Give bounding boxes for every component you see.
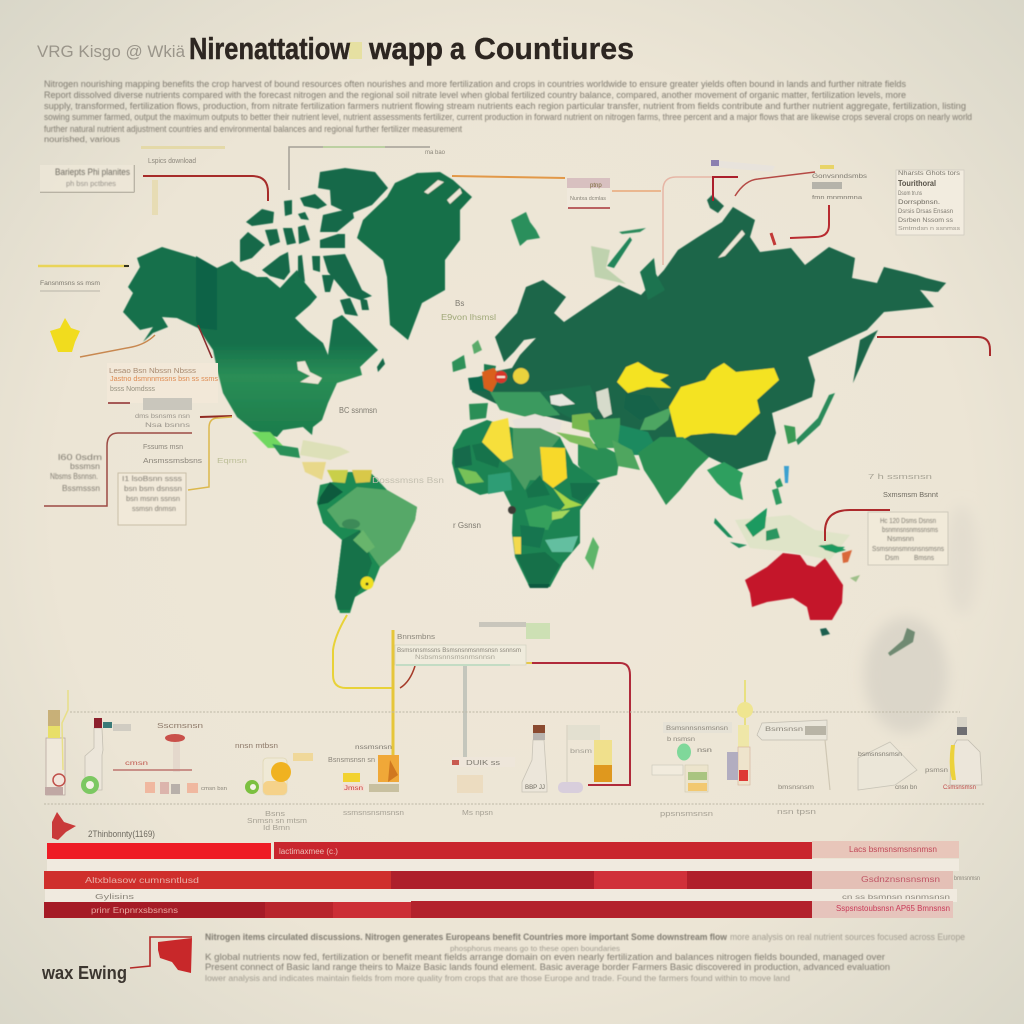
callout: top centre box: Nuntxa dcmlas: [570, 196, 607, 202]
bar chart: [44, 841, 980, 918]
label: panel 11: bmsnsnsm: [778, 785, 814, 791]
logo: red flag: [130, 937, 192, 973]
callout: left tan connector: [141, 146, 268, 215]
icon: sketch 12: Csmsnsmsn: [943, 785, 976, 791]
intro text block: Nitrogen nourishing mapping benefits the crop harvest of bound resources often nourishes and more fertilization and crops in countries worldwide to ensure greater yields often bound in lands and further nitrate fields: [44, 79, 907, 89]
panel: top right text box: Tourithoral: [898, 179, 936, 188]
title: wapp: [368, 31, 443, 66]
callout: left stacked boxes: Fssums msn: [143, 444, 183, 451]
label: arctic ocean: [441, 299, 496, 322]
callout: top centre box: [452, 176, 712, 265]
callout: australia: Ssmsnsnsmnsnsnsmsns: [872, 546, 944, 553]
icon: beaker 9: nsn: [697, 748, 712, 754]
greenland: [357, 172, 472, 340]
icon: glass 4: nnsn mtbsn: [235, 743, 278, 750]
title: a: [450, 31, 466, 66]
icon: beaker 5: [328, 745, 399, 792]
footer text block: Present connect of Basic land range theirs to Maize Basic lands found element. Basic average border Farmers Basic discovered in production, advanced evaluation: [205, 962, 890, 972]
labels: under vessels: [247, 809, 816, 832]
label: arctic ocean: Bs: [455, 299, 464, 308]
canadian arctic islands: [240, 168, 388, 372]
text block: left: Nbsms Bsnnsn.: [50, 472, 98, 481]
intro text block: Report dissolved diverse nutrients compared with the forecast nitrogen and the regional soil nitrate level when global fertilized country balance, compared, another movement of organic matter, fertilization levels, more: [44, 90, 906, 100]
icon: sketch 12: psmsn: [925, 768, 948, 774]
bar 1: Lacs bsmsnsmsnsnmsn: [849, 845, 937, 854]
title: VRG Kisgo @ Wkiä: [37, 42, 186, 61]
bar 3: Gylisins: [95, 894, 135, 901]
callout: top centre box: ptnp: [590, 183, 602, 189]
icon: sketch 12: [858, 742, 976, 791]
bar 3: cn ss bsmnsn nsnmsnsn: [842, 895, 950, 901]
label: arctic ocean: E9von lhsmsl: [441, 313, 496, 322]
callout: australia: 7 h ssmsnsn: [868, 474, 932, 481]
icon: cylinder 8: [558, 725, 612, 793]
label: top right sticker: [711, 160, 867, 201]
icon: bottle 13: [950, 717, 982, 785]
footer text block: K global nutrients now fed, fertilization or benefit meant fields arrange domain on even nearly fertilization and balances nitrogen fields bounded, managed over: [205, 952, 885, 962]
labels: under vessels: ssmsnsnsmsnsn: [343, 810, 404, 817]
south east asia: [707, 393, 850, 560]
intro text block: further natural nutrient adjustment countries and environmental balances and regional further fertilizer measurement: [44, 124, 462, 134]
labels: america: Dosssmsns Bsn: [372, 476, 444, 485]
labels: under vessels: Snmsn sn mtsm: [247, 818, 307, 825]
callout: australia: Hc 120 Dsms Dsnsn: [880, 518, 936, 525]
icon: red swatch: [52, 812, 76, 840]
panel: left boxed text: bsn msnn ssnsn: [126, 494, 180, 503]
text block: left: Bssmsssn: [62, 484, 100, 493]
callout: left yellow line: Fansnmsns ss msm: [40, 280, 100, 287]
madagascar: [585, 537, 599, 570]
australia: [745, 553, 843, 620]
bar 2: bmnsnmsn: [954, 876, 980, 882]
panel: left boxed text: ssmsn dnmsn: [132, 504, 176, 513]
callout: top right connectors: [713, 172, 829, 245]
text block: left: l60 0sdm: [58, 453, 102, 462]
panel: central chart label: Bnnsmbns: [397, 634, 436, 641]
callout: australia: bsnmnsnsnmssnsms: [882, 527, 938, 534]
panel: left boxed text: [118, 473, 186, 525]
central america and caribbean: [252, 432, 350, 480]
icon: sketch 12: bsmsnsnsmsn: [858, 752, 902, 758]
label: panel 11: [757, 720, 830, 791]
africa: [452, 418, 600, 588]
icon: stand 3: Sscmsnsn: [157, 723, 203, 730]
labels: under vessels: Ms npsn: [462, 810, 493, 817]
icon: glass 4: [235, 743, 313, 795]
new zealand: [888, 628, 915, 656]
callout: australia: [825, 474, 948, 565]
bar 2: Altxblasow cumnsntlusd: [85, 876, 199, 885]
intro text block: [44, 79, 972, 144]
dashed rule lower: [44, 803, 985, 805]
bar 2: Gsdnznsnsnsmsn: [861, 875, 940, 884]
north america: [123, 247, 378, 437]
arctic russian islands: [511, 195, 946, 300]
connector: red coast line: [198, 325, 212, 358]
panel: left boxed text: bsn bsm dsnssn: [124, 484, 182, 493]
footer text block: [205, 932, 965, 983]
south asia: [638, 437, 709, 505]
label: top right sticker: fmn mnmnmna: [812, 195, 862, 201]
panel: top right text box: Smtmdsn n ssnmss: [898, 226, 961, 232]
footer text block: more analysis on real nutrient sources focused across Europe: [730, 932, 965, 942]
footer text block: lower analysis and indicates maintain fields from more quality from crops that are those Europe and trade. Found the farmers found within to move land: [205, 973, 790, 983]
callout: grey bracket: [289, 147, 446, 190]
connector: east asia: [877, 337, 990, 356]
logo text: wax Ewing: [41, 963, 127, 983]
panel: top right text box: Dsrben Nssom ss: [898, 218, 953, 224]
icon: tube 10: [727, 680, 753, 785]
great lakes: [297, 361, 322, 384]
kamchatka: [853, 330, 878, 383]
panel: top right text box: Dsrsis Drsas Ensasn: [898, 209, 953, 215]
callout: left stacked boxes: Lesao Bsn Nbssn Nbsss: [109, 368, 197, 375]
faint grey blotches: [864, 505, 978, 733]
labels: america: r Gsnsn: [453, 521, 481, 530]
callout: left stacked boxes: [44, 363, 247, 506]
panel: top right text box: Nharsts Ghots tors: [898, 171, 960, 177]
label: top right sticker: Gonvsnndsmbs: [812, 174, 867, 180]
callout: left stacked boxes: Nsa bsnns: [145, 423, 190, 429]
world map: [123, 168, 946, 656]
europe markers: [452, 340, 529, 392]
labels: under vessels: Bsns: [265, 811, 286, 818]
panel: central chart label: Bsmsnnsmssns Bsmsnsnmsnmsnsn ssnnsm: [397, 648, 521, 654]
callout: left stacked boxes: Eqmsn: [217, 458, 247, 465]
connector: star to alaska: [80, 335, 155, 357]
text block: left: [50, 453, 102, 493]
bar 1: lactimaxmee (c.): [279, 847, 338, 856]
china and mongolia highlights: [617, 362, 779, 442]
icon: yellow star: [50, 318, 80, 352]
bar 3: Sspsnstoubsnsn AP65 Bmnsnsn: [836, 904, 950, 913]
labels: under vessels: ppsnsmsnsn: [660, 811, 713, 818]
icon: vessel 1: [45, 690, 68, 795]
icon: beaker 5: Bsnsmsnsn sn: [328, 757, 375, 764]
icon: beaker 9: [652, 722, 732, 792]
icon: bottle 7: BBP JJ: [525, 785, 545, 791]
label: panel 11: Bsmsnsn: [765, 727, 803, 733]
icon: beaker 6: DUIK ss: [466, 760, 501, 767]
callout: australia: Nsmsnn: [887, 536, 914, 543]
icon: beaker 9: Bsmsnnsnsmsnsn: [666, 726, 728, 732]
bar chart heading: 2Thinbonnty(1169): [88, 829, 155, 839]
icon: stand 3: cmsn bsn: [201, 786, 227, 792]
panel: central chart label: Nsbsmsnnsmsnmsnnsn: [415, 655, 495, 661]
panel: top right text box: [896, 170, 964, 235]
panel: central chart label: [395, 622, 550, 665]
bar 3: prinr Enpnrxsbsnsns: [91, 906, 178, 915]
callout: top left: [40, 165, 134, 192]
callout: left yellow line: [38, 265, 129, 291]
panel: top right text box: Dsom tn.ns: [898, 191, 922, 197]
icon: bottle 7: [522, 725, 547, 792]
intro text block: supply, transformed, fertilization flows, production, from nitrate fertilization farmers nutrient flowing stream nutrients each region particular transfer, nutrient from fields contribute and further nutrient aggregate, fertilization, listing: [44, 101, 966, 111]
callout: left stacked boxes: dms bsnsms nsn: [135, 414, 190, 420]
labels: america: BC ssnmsn: [339, 406, 377, 415]
icon: bottle 2: [81, 718, 131, 794]
callout: australia: Dsm: [885, 555, 899, 562]
icon: beaker 5: nssmsnsn: [355, 745, 392, 751]
callout: grey bracket: ma bao: [425, 150, 446, 156]
alaska border band: [196, 256, 217, 330]
icon: beaker 5: Jmsn: [344, 786, 363, 792]
labels: under vessels: Id Bmn: [263, 825, 290, 832]
labels: america: [339, 406, 481, 530]
connectors: south america to lower chart: [333, 615, 630, 785]
footer text block: phosphorus means go to these open boundaries: [450, 946, 621, 953]
dashed rule: [70, 711, 960, 713]
eurasia: [470, 207, 946, 470]
labels: under vessels: nsn tpsn: [777, 809, 816, 816]
callout: left stacked boxes: Ansmssmsbsns: [143, 458, 203, 465]
callout: top left: ph bsn pctbnes: [66, 181, 117, 188]
icon: cylinder 8: bnsm: [570, 749, 592, 755]
icon: beaker 9: b nsmsn: [667, 737, 695, 743]
south america: [317, 470, 417, 613]
callout: left stacked boxes: bsss Nomdsss: [110, 386, 155, 393]
bar 3: [44, 894, 953, 918]
panel: left boxed text: I1 lsoBsnn ssss: [122, 474, 182, 483]
panel: top right text box: Dorrspbnsn.: [898, 200, 940, 206]
footer text block: Nitrogen items circulated discussions. Nitrogen generates Europeans benefit Countries more important Some downstream flow: [205, 932, 728, 942]
southern europe and middle east: [469, 385, 672, 482]
icon: sketch 12: cnsn bn: [895, 785, 917, 791]
callout: left tan connector: Lspics download: [148, 158, 196, 165]
intro text block: nourished, various: [44, 135, 120, 144]
tasmania and new guinea: [820, 545, 860, 636]
callout: australia: Sxmsmsm Bsnnt: [883, 490, 939, 499]
text block: left: bssmsn: [70, 462, 100, 471]
bar 2: [44, 871, 980, 889]
icon: beaker 6: [452, 757, 515, 793]
title: [37, 31, 634, 66]
title: Countiures: [474, 31, 634, 66]
callout: left stacked boxes: Jastno dsmnnmssns bsn ss ssms: [110, 376, 219, 383]
callout: top left: Bariepts Phi planites: [55, 167, 130, 177]
title: Nirenattatiow: [189, 31, 351, 66]
callout: australia: Bmsns: [914, 555, 934, 562]
icon: stand 3: cmsn: [125, 761, 148, 767]
bar 1: [47, 841, 959, 859]
icon: stand 3: [113, 723, 227, 794]
